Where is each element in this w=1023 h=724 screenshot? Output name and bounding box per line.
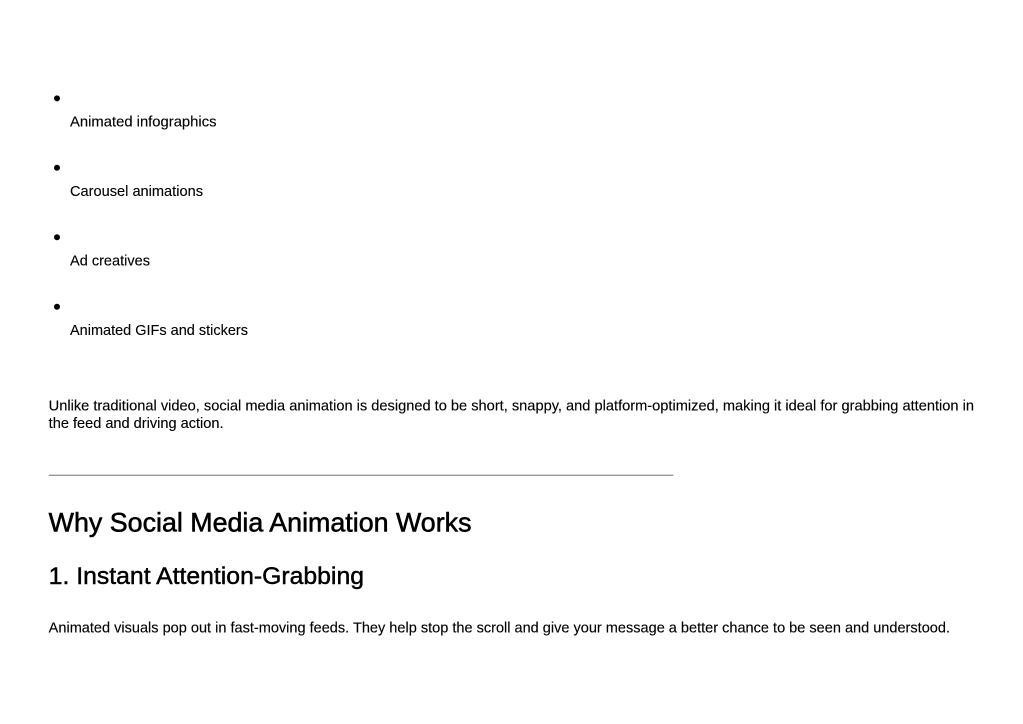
body paragraph: Animated visuals pop out in fast-moving feeds. They help stop the scroll and give your message a better chance to be seen and understood.: [49, 621, 950, 637]
list item: ad creatives: [54, 234, 150, 269]
heading: why social media animation works: Why Social Media Animation Works: [49, 508, 471, 538]
list item: ad creatives: Ad creatives: [70, 253, 150, 269]
heading: instant attention-grabbing: 1. Instant Attention-Grabbing: [49, 563, 364, 590]
list item: animated infographics: [54, 95, 216, 130]
intro paragraph: [49, 399, 974, 432]
intro paragraph: the feed and driving action.: [49, 416, 224, 432]
intro paragraph: Unlike traditional video, social media animation is designed to be short, snappy, and platform-optimized, making it ideal for grabbing attention in: [49, 399, 974, 415]
bullet list: [54, 95, 248, 339]
list item: animated gifs and stickers: [54, 304, 248, 339]
list item: animated gifs and stickers: Animated GIFs and stickers: [70, 323, 248, 339]
list item: carousel animations: [54, 165, 203, 200]
list item: animated infographics: Animated infographics: [70, 114, 216, 130]
list item: carousel animations: Carousel animations: [70, 184, 203, 200]
